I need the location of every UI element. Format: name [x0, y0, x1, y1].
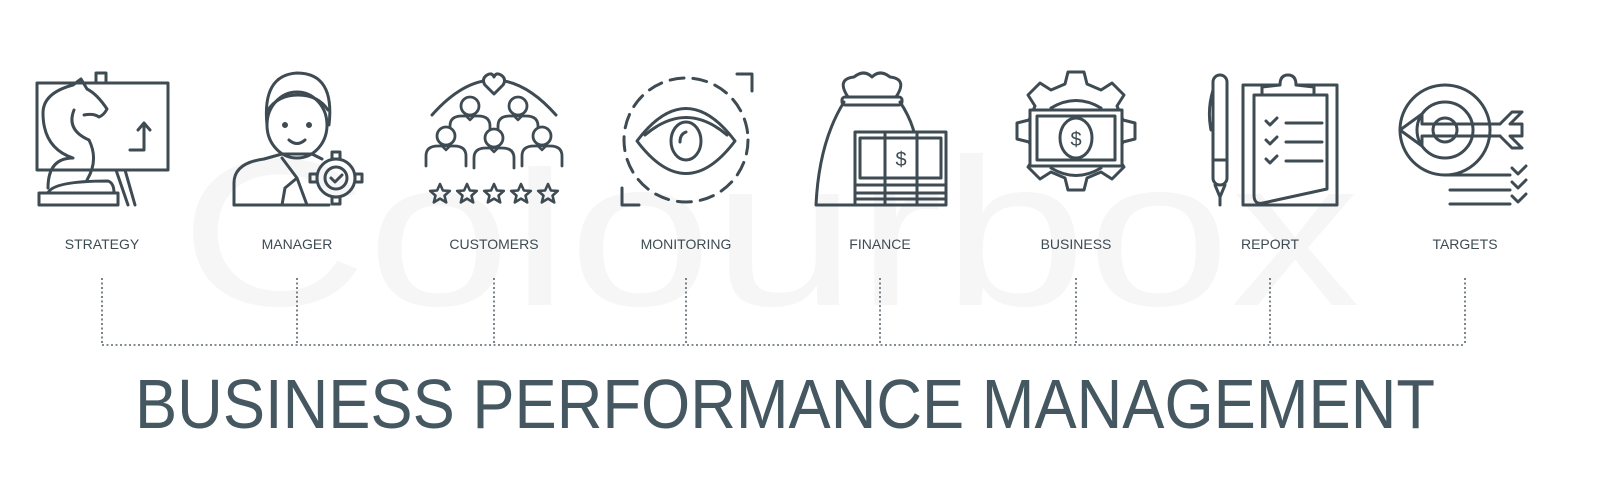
labels: MANAGER — [262, 236, 332, 252]
icon: monitoring — [622, 74, 752, 205]
labels: CUSTOMERS — [449, 236, 539, 252]
icon: business: $ — [1070, 129, 1082, 151]
watermark: Colourbox — [180, 115, 1360, 350]
labels: BUSINESS — [1041, 236, 1111, 252]
icon: finance — [816, 73, 946, 205]
icon: business — [1017, 72, 1135, 190]
labels — [65, 236, 1498, 252]
labels: STRATEGY — [65, 236, 140, 252]
labels: MONITORING — [641, 236, 731, 252]
title: BUSINESS PERFORMANCE MANAGEMENT — [135, 365, 1435, 443]
icon: manager — [234, 73, 362, 205]
icon: report — [1209, 75, 1337, 205]
labels: TARGETS — [1432, 236, 1498, 252]
labels: REPORT — [1241, 236, 1299, 252]
icon: finance: $ — [895, 149, 907, 171]
icon: customers — [426, 74, 562, 202]
connector lines — [102, 278, 1465, 345]
icon: strategy — [37, 73, 168, 205]
icon: targets — [1400, 85, 1526, 204]
labels: FINANCE — [849, 236, 911, 252]
